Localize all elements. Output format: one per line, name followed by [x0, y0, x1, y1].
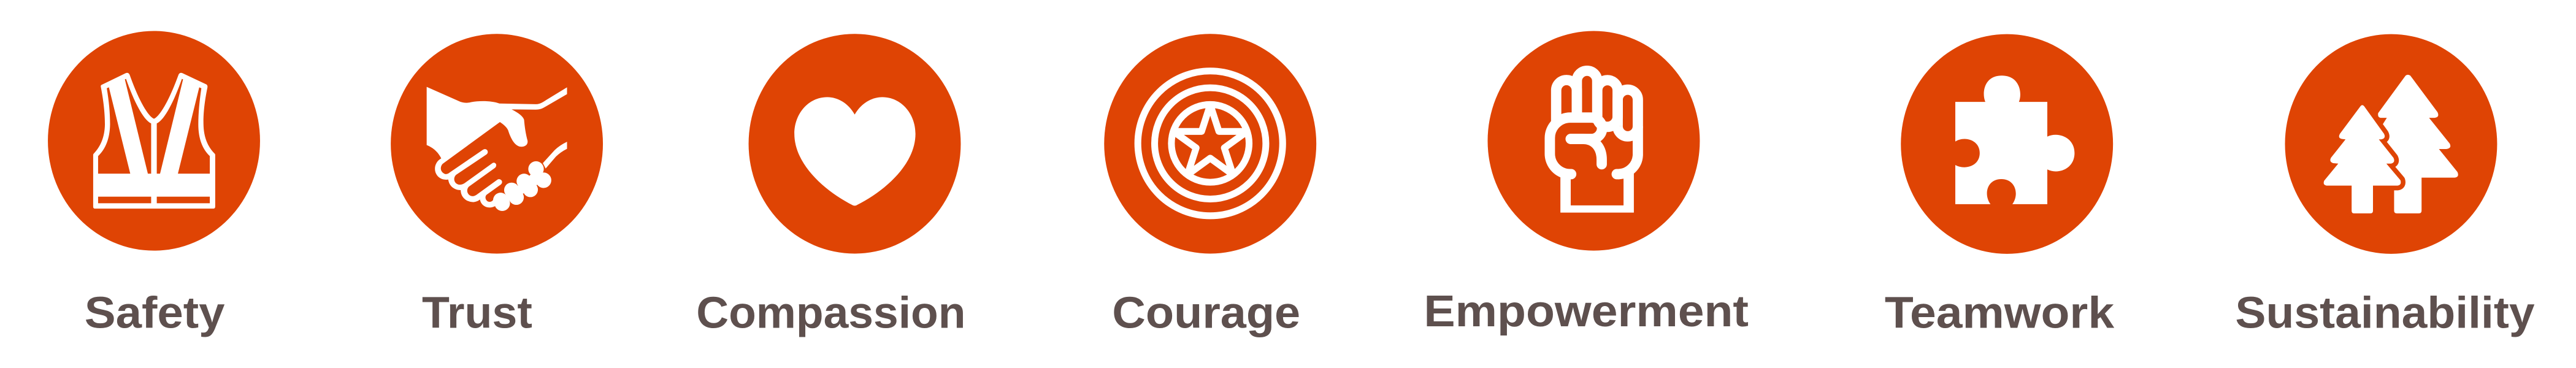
panel: Sustainability	[2235, 34, 2535, 338]
badge circle: Courage	[1104, 34, 1316, 253]
label: Teamwork: Teamwork	[1885, 289, 2115, 338]
panel: Teamwork	[1885, 34, 2115, 338]
panel: Courage	[1104, 34, 1316, 338]
badge circle: Sustainability	[2285, 34, 2497, 254]
panel: Empowerment	[1424, 31, 1749, 336]
panel: Compassion	[696, 34, 965, 338]
icon: safety vest	[93, 73, 215, 209]
icon: raised fist	[1550, 71, 1638, 213]
badge circle: Compassion	[749, 34, 960, 253]
label: Compassion: Compassion	[696, 289, 965, 338]
badge circle: Teamwork	[1901, 34, 2113, 254]
label: Empowerment: Empowerment	[1424, 287, 1749, 336]
badge circle: Empowerment	[1488, 31, 1700, 251]
icon: puzzle piece	[1955, 75, 2074, 204]
label: Safety: Safety	[85, 289, 225, 338]
icon: shield with star	[1138, 71, 1282, 216]
icon: heart	[794, 97, 916, 205]
panel: Safety	[48, 31, 260, 338]
label: Trust: Trust	[422, 289, 532, 338]
icon: handshake	[427, 87, 567, 211]
label: Courage: Courage	[1112, 289, 1300, 338]
badge circle: Trust	[391, 34, 603, 253]
icon: two pine trees	[2324, 75, 2458, 213]
panel: Trust	[391, 34, 603, 338]
badge circle: Safety	[48, 31, 260, 251]
label: Sustainability: Sustainability	[2235, 289, 2535, 338]
